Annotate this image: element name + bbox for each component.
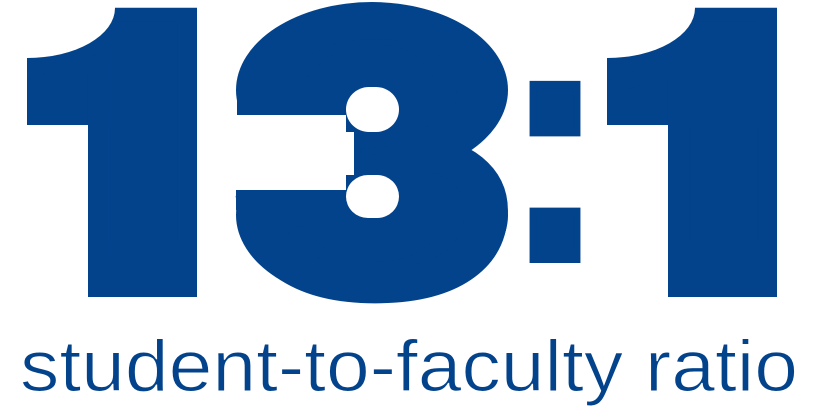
digit 1 xyxy=(27,8,197,297)
digit 1 xyxy=(607,8,777,297)
ratio: 13:1 xyxy=(27,2,777,304)
caption: student-to-faculty ratio xyxy=(20,327,798,407)
